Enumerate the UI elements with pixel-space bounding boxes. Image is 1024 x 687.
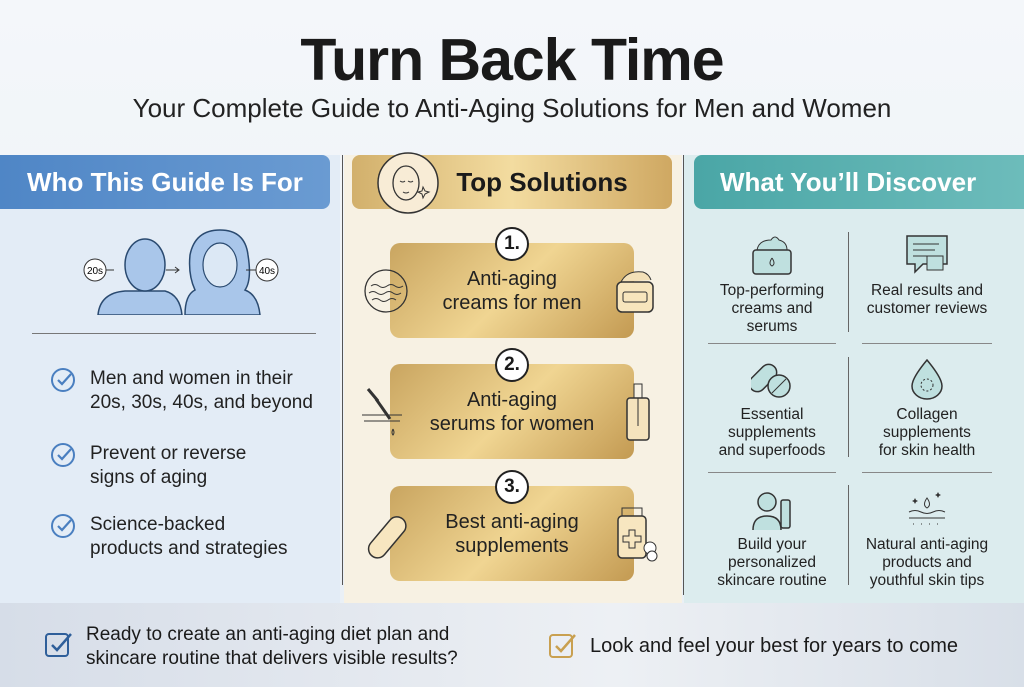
icon: dropper: [362, 388, 402, 436]
icon: man and woman: 20s: [87, 266, 103, 277]
heading: who: [0, 155, 330, 209]
item: routine: [717, 492, 827, 589]
icon: serum bottle: [626, 384, 650, 441]
list item 2: Prevent or reverse: [90, 443, 246, 464]
item: reviews: [867, 235, 987, 317]
icon: face: [377, 152, 439, 214]
item: supplements: and superfoods: [719, 442, 825, 459]
item: creams: Top-performing: [720, 282, 824, 299]
heading: top solutions: [352, 155, 672, 209]
item: creams: [720, 236, 824, 335]
item: natural: products and: [882, 554, 972, 571]
icon: skin waves: [364, 269, 408, 313]
subtitle: Your Complete Guide to Anti-Aging Solutions for Men and Women: [133, 93, 891, 123]
list item 1: [51, 368, 313, 413]
item: creams: serums: [747, 318, 797, 335]
icon: man and woman: 40s: [259, 266, 275, 277]
heading: top solutions: Top Solutions: [456, 166, 628, 196]
heading: who: Who This Guide Is For: [27, 166, 303, 196]
item: reviews: Real results and: [871, 282, 983, 299]
card 1: [390, 243, 634, 338]
item: natural: youthful skin tips: [870, 572, 984, 589]
card 2: serums for women: [430, 412, 594, 434]
list item 3: products and strategies: [90, 538, 288, 559]
icon: checkbox gold: [549, 634, 576, 658]
item: supplements: Essential: [741, 406, 803, 423]
card 1: creams for men: [443, 292, 581, 314]
icon: supplement bottle: [617, 508, 658, 562]
list item 1: 20s, 30s, 40s, and beyond: [90, 392, 313, 413]
badge 2: 2.: [504, 354, 520, 375]
text: look and feel: Look and feel your best for years to come: [590, 635, 958, 657]
panel: who this guide is for: [0, 155, 340, 603]
item: natural: Natural anti-aging: [866, 536, 988, 553]
card 2: Anti-aging: [467, 388, 557, 410]
item: routine: personalized: [728, 554, 816, 571]
badge 3: [495, 470, 529, 504]
text: ready: skincare routine that delivers visible results?: [86, 648, 458, 669]
heading: discover: What You’ll Discover: [720, 166, 976, 196]
item: supplements: [719, 364, 825, 459]
item: collagen: for skin health: [879, 442, 975, 459]
item: collagen: Collagen: [896, 406, 958, 423]
icon: man and woman: [84, 229, 278, 315]
icon: pill: [368, 516, 407, 559]
badge 2: [495, 348, 529, 382]
panel: what you'll discover: [684, 155, 1024, 603]
text: ready: Ready to create an anti-aging diet plan and: [86, 624, 449, 645]
list item 3: [51, 514, 288, 559]
item: collagen: [878, 359, 975, 459]
item: creams: creams and: [732, 300, 812, 317]
list item 2: [51, 443, 246, 488]
list item 2: signs of aging: [90, 467, 207, 488]
card 3: Best anti-aging: [445, 510, 579, 532]
card 2: [390, 364, 634, 459]
item: routine: skincare routine: [717, 572, 827, 589]
card 3: [390, 486, 634, 581]
icon: cream jar: [616, 271, 654, 313]
item: supplements: supplements: [728, 424, 816, 441]
heading: discover: [694, 155, 1024, 209]
title: Turn Back Time: [300, 27, 724, 93]
card 3: supplements: [455, 534, 569, 556]
item: collagen: supplements: [883, 424, 971, 441]
badge 3: 3.: [504, 476, 520, 497]
text: ready: [86, 624, 458, 669]
panel: top solutions: [344, 155, 682, 603]
list item 3: Science-backed: [90, 514, 225, 535]
list item 1: Men and women in their: [90, 368, 293, 389]
badge 1: 1.: [504, 233, 520, 254]
bottom banner: [0, 603, 1024, 687]
badge 1: [495, 227, 529, 261]
icon: checkbox blue: [45, 633, 72, 657]
item: natural: [866, 492, 988, 589]
card 1: Anti-aging: [467, 268, 557, 290]
item: reviews: customer reviews: [867, 300, 987, 317]
item: routine: Build your: [738, 536, 806, 553]
